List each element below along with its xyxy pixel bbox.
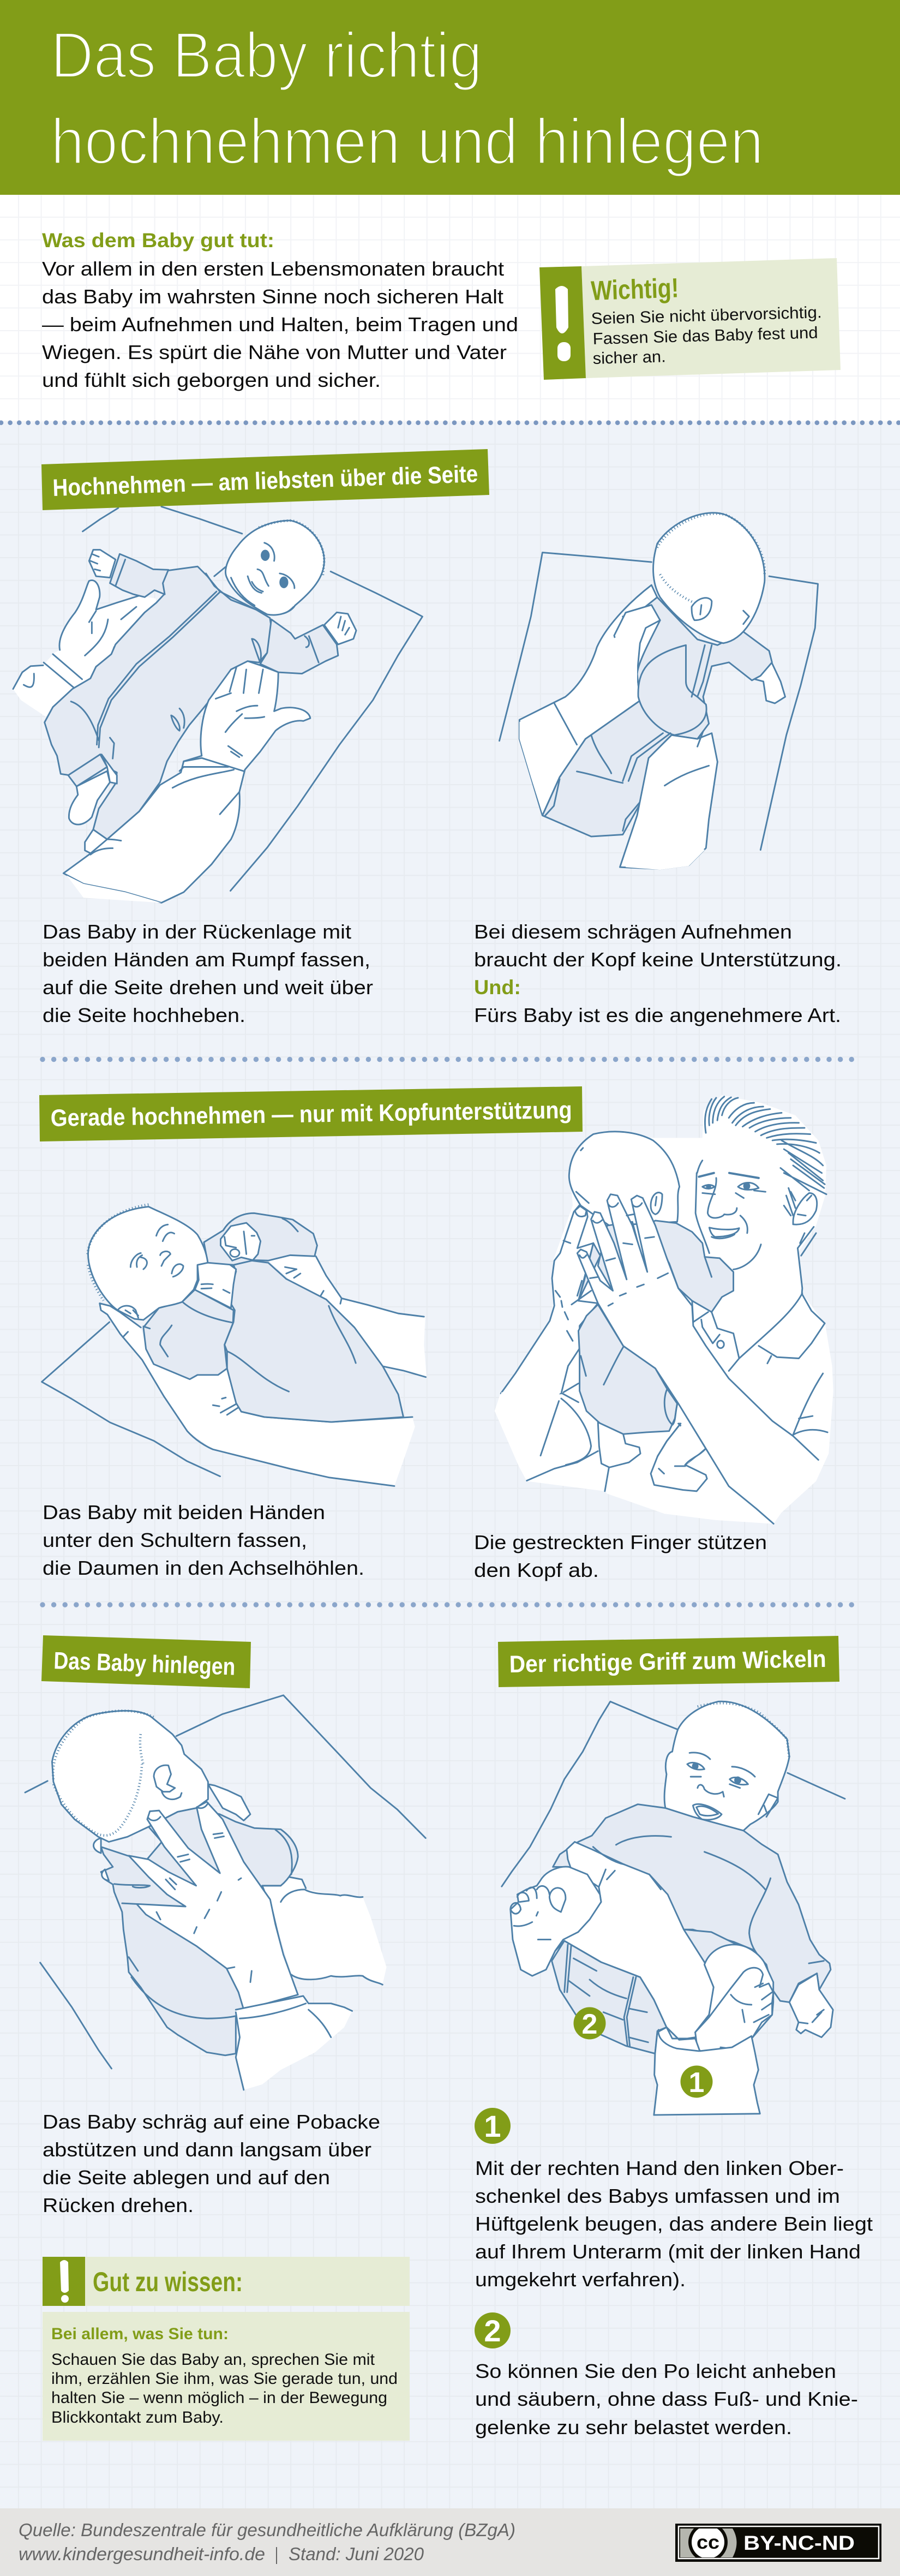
header banner [0, 0, 900, 195]
intro text block: das Baby im wahrsten Sinne noch sicheren Halt [42, 285, 503, 308]
panel: Gut zu wissen: Blickkontakt zum Baby. [51, 2408, 224, 2426]
baby leg [555, 1842, 713, 2040]
panel: Gut zu wissen: Gut zu wissen: [93, 2267, 243, 2297]
baby suit [542, 597, 772, 836]
section heading: Der richtige Griff: Der richtige Griff zum Wickeln [509, 1646, 826, 1678]
baby fist [195, 1262, 236, 1308]
source text [19, 2520, 515, 2564]
callout: Wichtig: sicher an. [592, 348, 666, 368]
baby hand [789, 1974, 833, 2037]
adult fingers [614, 605, 660, 674]
face [695, 1161, 817, 1253]
illustration: father holding baby up [495, 1095, 833, 1524]
step 2 text [475, 2360, 858, 2438]
caption: hands under shoulders: unter den Schultern fassen, [43, 1529, 307, 1551]
caption: hands under shoulders: die Daumen in den Achselhöhlen. [43, 1557, 364, 1579]
step 2 badge: 2 [484, 2314, 501, 2348]
step 1 text: Hüftgelenk beugen, das andere Bein liegt [475, 2213, 873, 2235]
caption: laying down: abstützen und dann langsam über [43, 2138, 371, 2161]
adult far arm [262, 1878, 387, 1985]
intro text block: Was dem Baby gut tut: [42, 229, 274, 252]
panel: Gut zu wissen: Schauen Sie das Baby an, sprechen Sie mit [51, 2351, 375, 2369]
caption: laying down: die Seite ablegen und auf den [43, 2166, 330, 2189]
panel: Gut zu wissen: halten Sie – wenn möglich – in der Bewegung [51, 2389, 387, 2407]
baby head [569, 1132, 680, 1226]
baby heels [93, 1838, 101, 1853]
callout: Wichtig: Seien Sie nicht übervorsichtig. [591, 303, 822, 328]
number badge 2 on illustration: 2 [582, 2009, 597, 2040]
licence badge: BY-NC-ND [743, 2532, 855, 2554]
step 2 text: So können Sie den Po leicht anheben [475, 2360, 836, 2382]
baby body [225, 1260, 404, 1422]
baby body [646, 1221, 734, 1312]
caption: fingers support head [474, 1531, 767, 1581]
caption: laying down: Rücken drehen. [43, 2194, 194, 2216]
icon: exclamation mark [60, 2260, 69, 2303]
step 1 text: Mit der rechten Hand den linken Ober- [475, 2157, 844, 2179]
adult near hand [129, 1802, 298, 2010]
illustration: straight lift, hands under shoulders [42, 1204, 427, 1486]
baby hand [752, 655, 785, 703]
baby head [226, 521, 324, 615]
panel: Gut zu wissen: ihm, erzählen Sie ihm, was Sie gerade tun, und [51, 2370, 398, 2388]
baby head [653, 513, 765, 643]
diaper [552, 1941, 667, 2054]
step 1 text [475, 2157, 873, 2291]
father's left arm and shirt [527, 1383, 609, 1491]
caption: hands under shoulders [43, 1501, 364, 1579]
caption: right: Fürs Baby ist es die angenehmere Art. [474, 1004, 841, 1026]
title: Das Baby richtig [51, 19, 482, 92]
adult right forearm [620, 733, 717, 869]
section heading: Das Baby hinlegen: Das Baby hinlegen [53, 1647, 236, 1681]
callout: Wichtig: Fassen Sie das Baby fest und [592, 324, 818, 348]
illustration: diagonal lift seen from behind [500, 513, 818, 870]
caption: right [474, 921, 842, 1026]
step 1 badge: 1 [484, 2109, 501, 2143]
baby left foot [511, 1867, 601, 1976]
section heading: Hochnehmen [41, 449, 489, 510]
baby arms [110, 554, 169, 597]
baby right foot [695, 1945, 773, 2055]
caption: right: Bei diesem schrägen Aufnehmen [474, 921, 792, 943]
adult far arm [268, 1255, 427, 1377]
step 1 text: umgekehrt verfahren). [475, 2268, 686, 2291]
baby feet [598, 1423, 640, 1467]
icon: exclamation mark [555, 286, 571, 361]
baby hands and feet [89, 550, 116, 578]
callout: Wichtig [539, 258, 841, 380]
footer [0, 2508, 900, 2576]
adult left arm [519, 585, 660, 815]
baby raised arm [204, 1213, 317, 1265]
caption: hands under shoulders: Das Baby mit beiden Händen [43, 1501, 325, 1523]
caption: left: beiden Händen am Rumpf fassen, [43, 948, 370, 971]
baby hand [208, 1784, 250, 1820]
intro text block [42, 229, 518, 391]
section heading: Gerade hochnehmen [39, 1086, 583, 1141]
source text: Stand: Juni 2020 [289, 2544, 424, 2564]
hair [705, 1097, 826, 1256]
baby head [52, 1711, 208, 1842]
baby romper [45, 566, 271, 839]
step 2 badge [475, 2312, 511, 2348]
licence badge [675, 2523, 881, 2562]
section heading: Das Baby hinlegen [41, 1635, 251, 1688]
adult near arm [100, 1304, 415, 1486]
intro text block: Wiegen. Es spürt die Nähe von Mutter und Vater [42, 341, 507, 363]
caption: left [43, 921, 373, 1026]
caption: right: Und: [474, 976, 521, 999]
section heading: Hochnehmen: Hochnehmen — am liebsten über die Seite [52, 461, 478, 501]
caption: right: braucht der Kopf keine Unterstützung. [474, 948, 842, 971]
caption: fingers support head: Die gestreckten Finger stützen [474, 1531, 767, 1553]
number badge 1 on illustration: 1 [689, 2067, 704, 2099]
illustration: lifting over the side, baby on mat [13, 506, 422, 903]
caption: left: die Seite hochheben. [43, 1004, 245, 1026]
intro text block: — beim Aufnehmen und Halten, beim Tragen und [42, 313, 518, 336]
father's front hand and forearm [577, 1194, 818, 1524]
illustration: laying the baby down [25, 1695, 425, 2090]
caption: laying down [43, 2111, 380, 2216]
baby head [664, 1701, 789, 1831]
caption: laying down: Das Baby schräg auf eine Pobacke [43, 2111, 380, 2133]
title: hochnehmen und hinlegen [51, 105, 764, 178]
title [51, 19, 764, 178]
caption: fingers support head: den Kopf ab. [474, 1559, 599, 1581]
licence badge: cc [697, 2532, 719, 2553]
step 2 text: und säubern, ohne dass Fuß- und Knie- [475, 2388, 858, 2410]
step 1 text: auf Ihrem Unterarm (mit der linken Hand [475, 2240, 861, 2263]
baby head [88, 1206, 208, 1320]
section heading: Gerade hochnehmen: Gerade hochnehmen — nur mit Kopfunterstützung [50, 1097, 572, 1132]
intro text block: und fühlt sich geborgen und sicher. [42, 369, 381, 391]
adult right hand and arm [63, 661, 310, 903]
adult arm with cuff [654, 2027, 760, 2115]
step 2 text: gelenke zu sehr belastet werden. [475, 2416, 792, 2438]
father silhouette [495, 1095, 833, 1524]
source text: Quelle: Bundeszentrale für gesundheitliche Aufklärung (BZgA) [19, 2520, 515, 2540]
number badge 2 on illustration [574, 2007, 605, 2040]
panel: Gut zu wissen [43, 2257, 410, 2441]
section heading: Der richtige Griff [498, 1636, 839, 1687]
source text: www.kindergesundheit-info.de [19, 2544, 265, 2564]
adult sleeve [236, 1996, 352, 2090]
callout: Wichtig: Wichtig! [590, 272, 679, 306]
number badge 1 on illustration [681, 2066, 712, 2099]
panel: Gut zu wissen: Bei allem, was Sie tun: [51, 2325, 229, 2343]
illustration: correct grip for changing a diaper [502, 1701, 845, 2115]
intro text block: Vor allem in den ersten Lebensmonaten braucht [42, 258, 504, 280]
baby top [553, 1804, 831, 2002]
step 1 badge [475, 2108, 511, 2144]
step 1 text: schenkel des Babys umfassen und im [475, 2185, 840, 2207]
baby body [101, 1808, 298, 2055]
caption: left: auf die Seite drehen und weit über [43, 976, 373, 999]
caption: left: Das Baby in der Rückenlage mit [43, 921, 351, 943]
